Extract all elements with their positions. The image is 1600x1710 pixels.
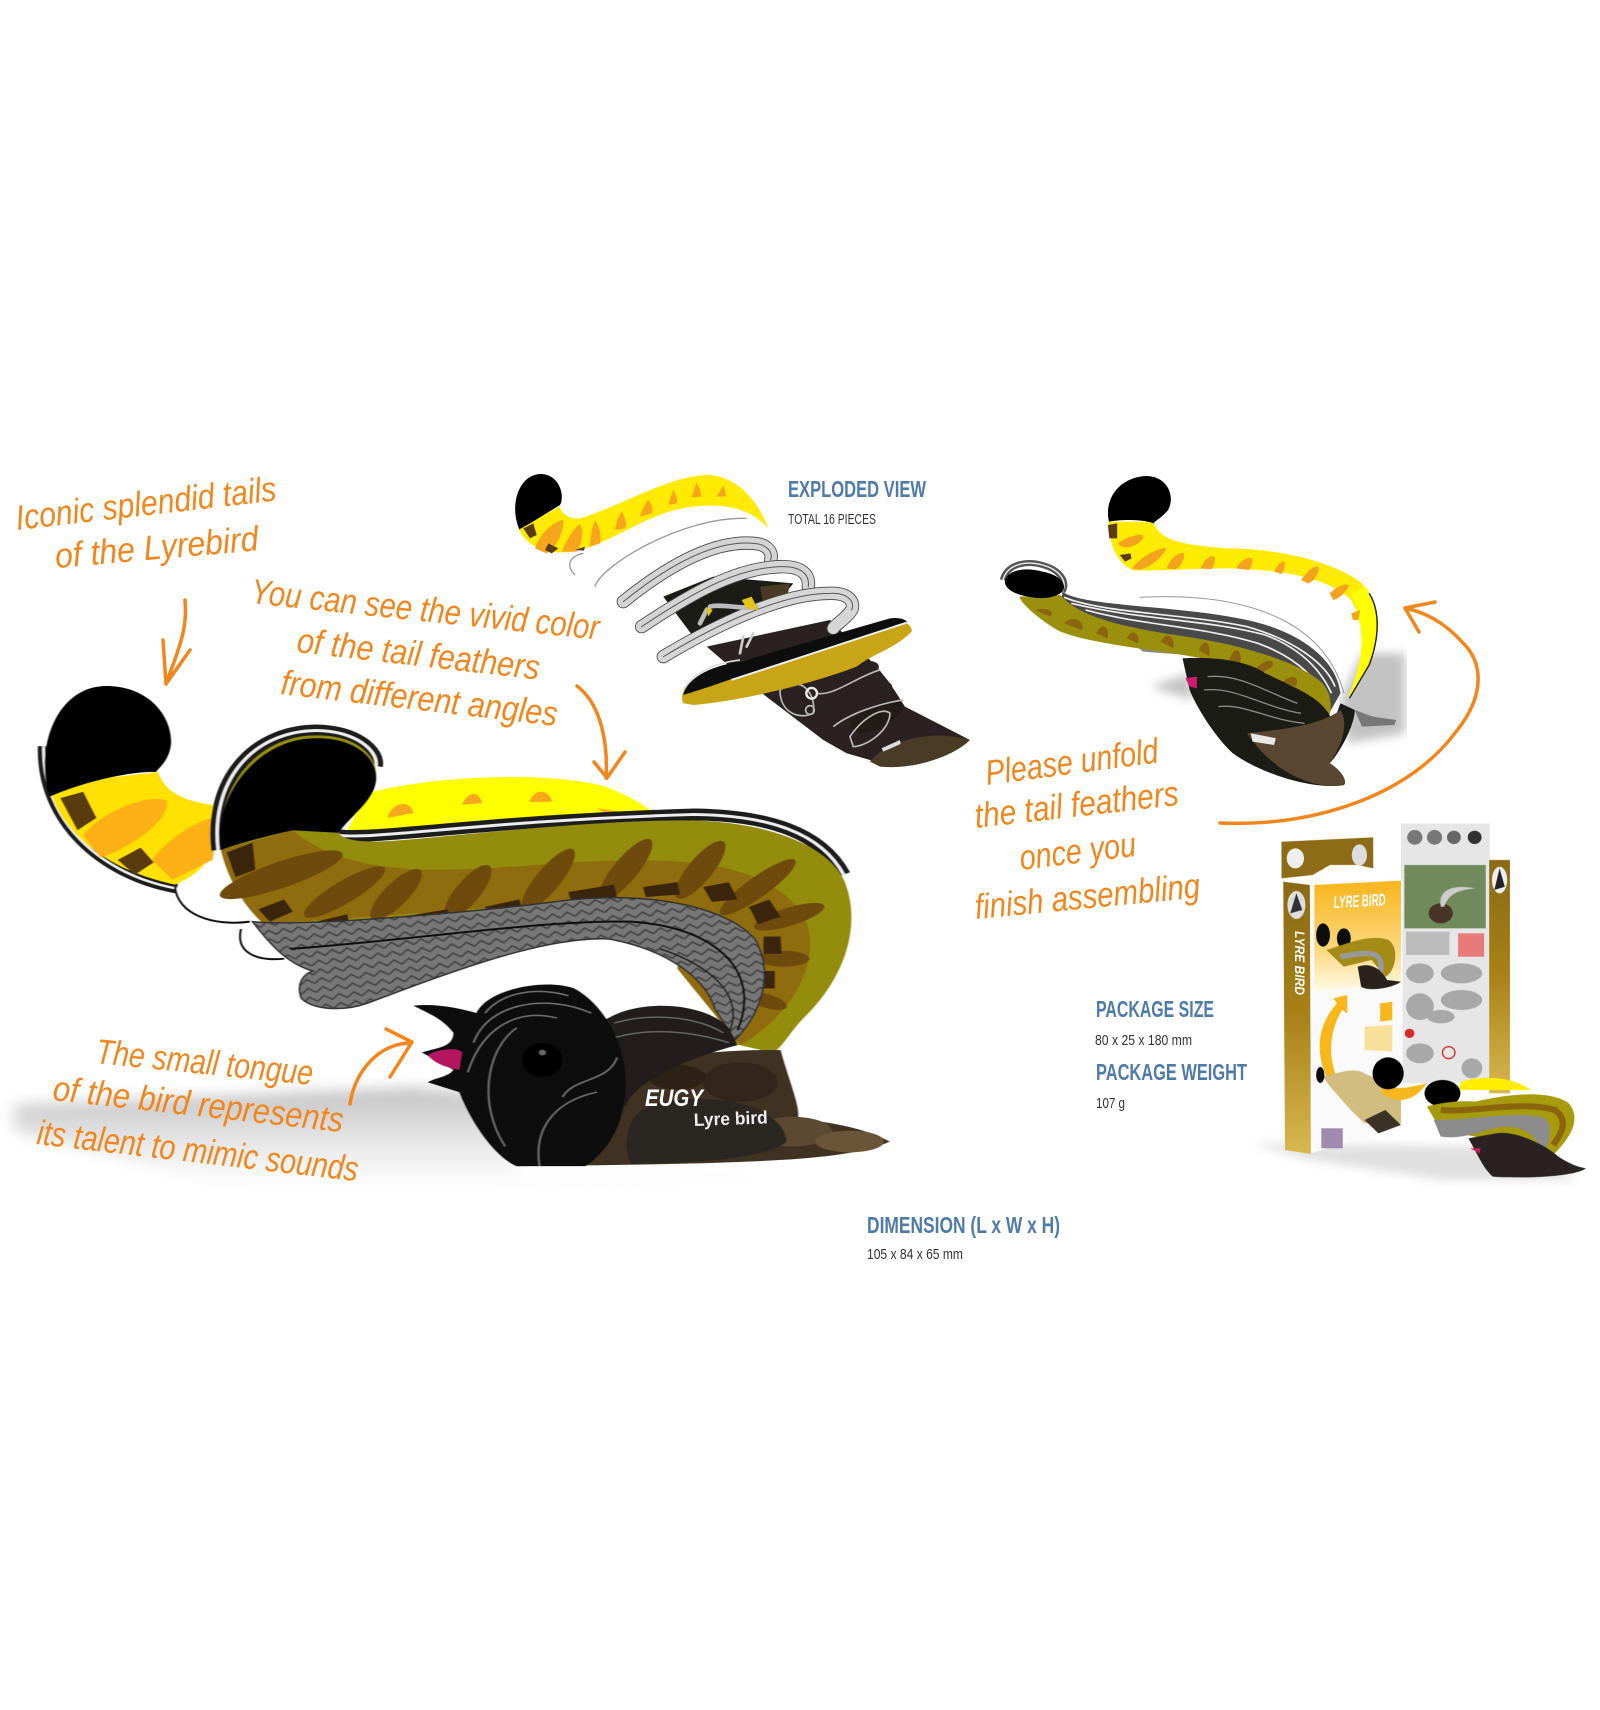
detached yellow tail	[515, 474, 768, 553]
callout: vivid color	[249, 572, 602, 734]
small bird body	[1183, 658, 1396, 786]
label: dimension	[867, 1212, 1060, 1263]
model logo text: Lyre bird	[693, 1107, 768, 1130]
callout: small tongue: The small tongue	[94, 1032, 315, 1093]
callout: small tongue: its talent to mimic sounds	[35, 1113, 360, 1189]
callout: unfold feathers: Please unfold	[983, 731, 1162, 793]
label: exploded view: TOTAL 16 PIECES	[788, 511, 876, 528]
shadow	[1150, 653, 1405, 743]
ground shadow	[14, 1087, 832, 1186]
callout: iconic tails	[13, 470, 278, 576]
unfolded small lyrebird	[1003, 476, 1405, 786]
callout: unfold feathers	[972, 731, 1202, 927]
thin white layers	[570, 518, 747, 587]
grey chevron feather band	[253, 898, 764, 1040]
label: package size	[1095, 996, 1214, 1049]
standing yellow tail	[1108, 476, 1377, 698]
package title text: LYRE BIRD	[1333, 890, 1386, 912]
callout: iconic tails: Iconic splendid tails	[13, 470, 278, 538]
label: package weight: 107 g	[1096, 1095, 1125, 1112]
label: package size: 80 x 25 x 180 mm	[1095, 1032, 1192, 1049]
label: package size: PACKAGE SIZE	[1096, 996, 1214, 1022]
exploded view model	[515, 474, 970, 767]
rear yellow tail	[44, 686, 651, 959]
box front cover	[1310, 878, 1403, 1153]
callout: vivid color: from different angles	[279, 663, 560, 734]
dark stacked body	[663, 577, 970, 767]
callout: unfold feathers: the tail feathers	[972, 774, 1181, 836]
model logo text: EUGY	[645, 1085, 705, 1112]
callout: small tongue	[35, 1032, 360, 1189]
open package parts	[1323, 1070, 1401, 1123]
small front bird	[1424, 1080, 1586, 1177]
callout: unfold feathers: finish assembling	[973, 866, 1202, 927]
flap emblem	[1287, 844, 1367, 868]
white folded feather edges	[175, 887, 284, 959]
callout: unfold feathers: once you	[1017, 825, 1138, 878]
callout: vivid color: of the tail feathers	[295, 621, 542, 688]
label: dimension: DIMENSION (L x W x H)	[867, 1212, 1060, 1238]
main lyrebird model	[14, 686, 890, 1186]
model logo text	[645, 1085, 768, 1130]
label: dimension: 105 x 84 x 65 mm	[867, 1246, 963, 1263]
callout: vivid color: You can see the vivid color	[249, 572, 602, 648]
arrow: to rear tail	[163, 600, 190, 684]
callout: small tongue: of the bird represents	[51, 1069, 346, 1140]
ground shadow	[1250, 1143, 1579, 1180]
package title text: LYRE BIRD	[1292, 931, 1308, 995]
label: package weight: PACKAGE WEIGHT	[1096, 1059, 1247, 1085]
package with bird	[1250, 823, 1586, 1180]
bird body and head	[413, 985, 890, 1166]
eye	[522, 1043, 563, 1077]
package title text	[1292, 890, 1386, 995]
arrow: to tail feathers	[577, 686, 625, 778]
box back panel	[1401, 823, 1510, 1093]
callout: iconic tails: of the Lyrebird	[53, 519, 261, 576]
front olive tail	[214, 730, 851, 1053]
tongue	[428, 1049, 462, 1070]
label: exploded view: EXPLODED VIEW	[788, 476, 926, 502]
label: exploded view	[788, 476, 926, 528]
box front spine	[1283, 882, 1311, 1154]
arrow: unfold curve	[1220, 602, 1478, 823]
feather markings	[214, 833, 828, 1014]
layered tail	[1003, 563, 1340, 725]
arrow: to tongue	[350, 1029, 412, 1104]
box top flap	[1282, 837, 1373, 878]
small yellow tail	[1373, 1057, 1531, 1100]
grey layers	[623, 543, 853, 657]
label: package weight	[1096, 1059, 1247, 1112]
gold disc	[682, 618, 912, 705]
